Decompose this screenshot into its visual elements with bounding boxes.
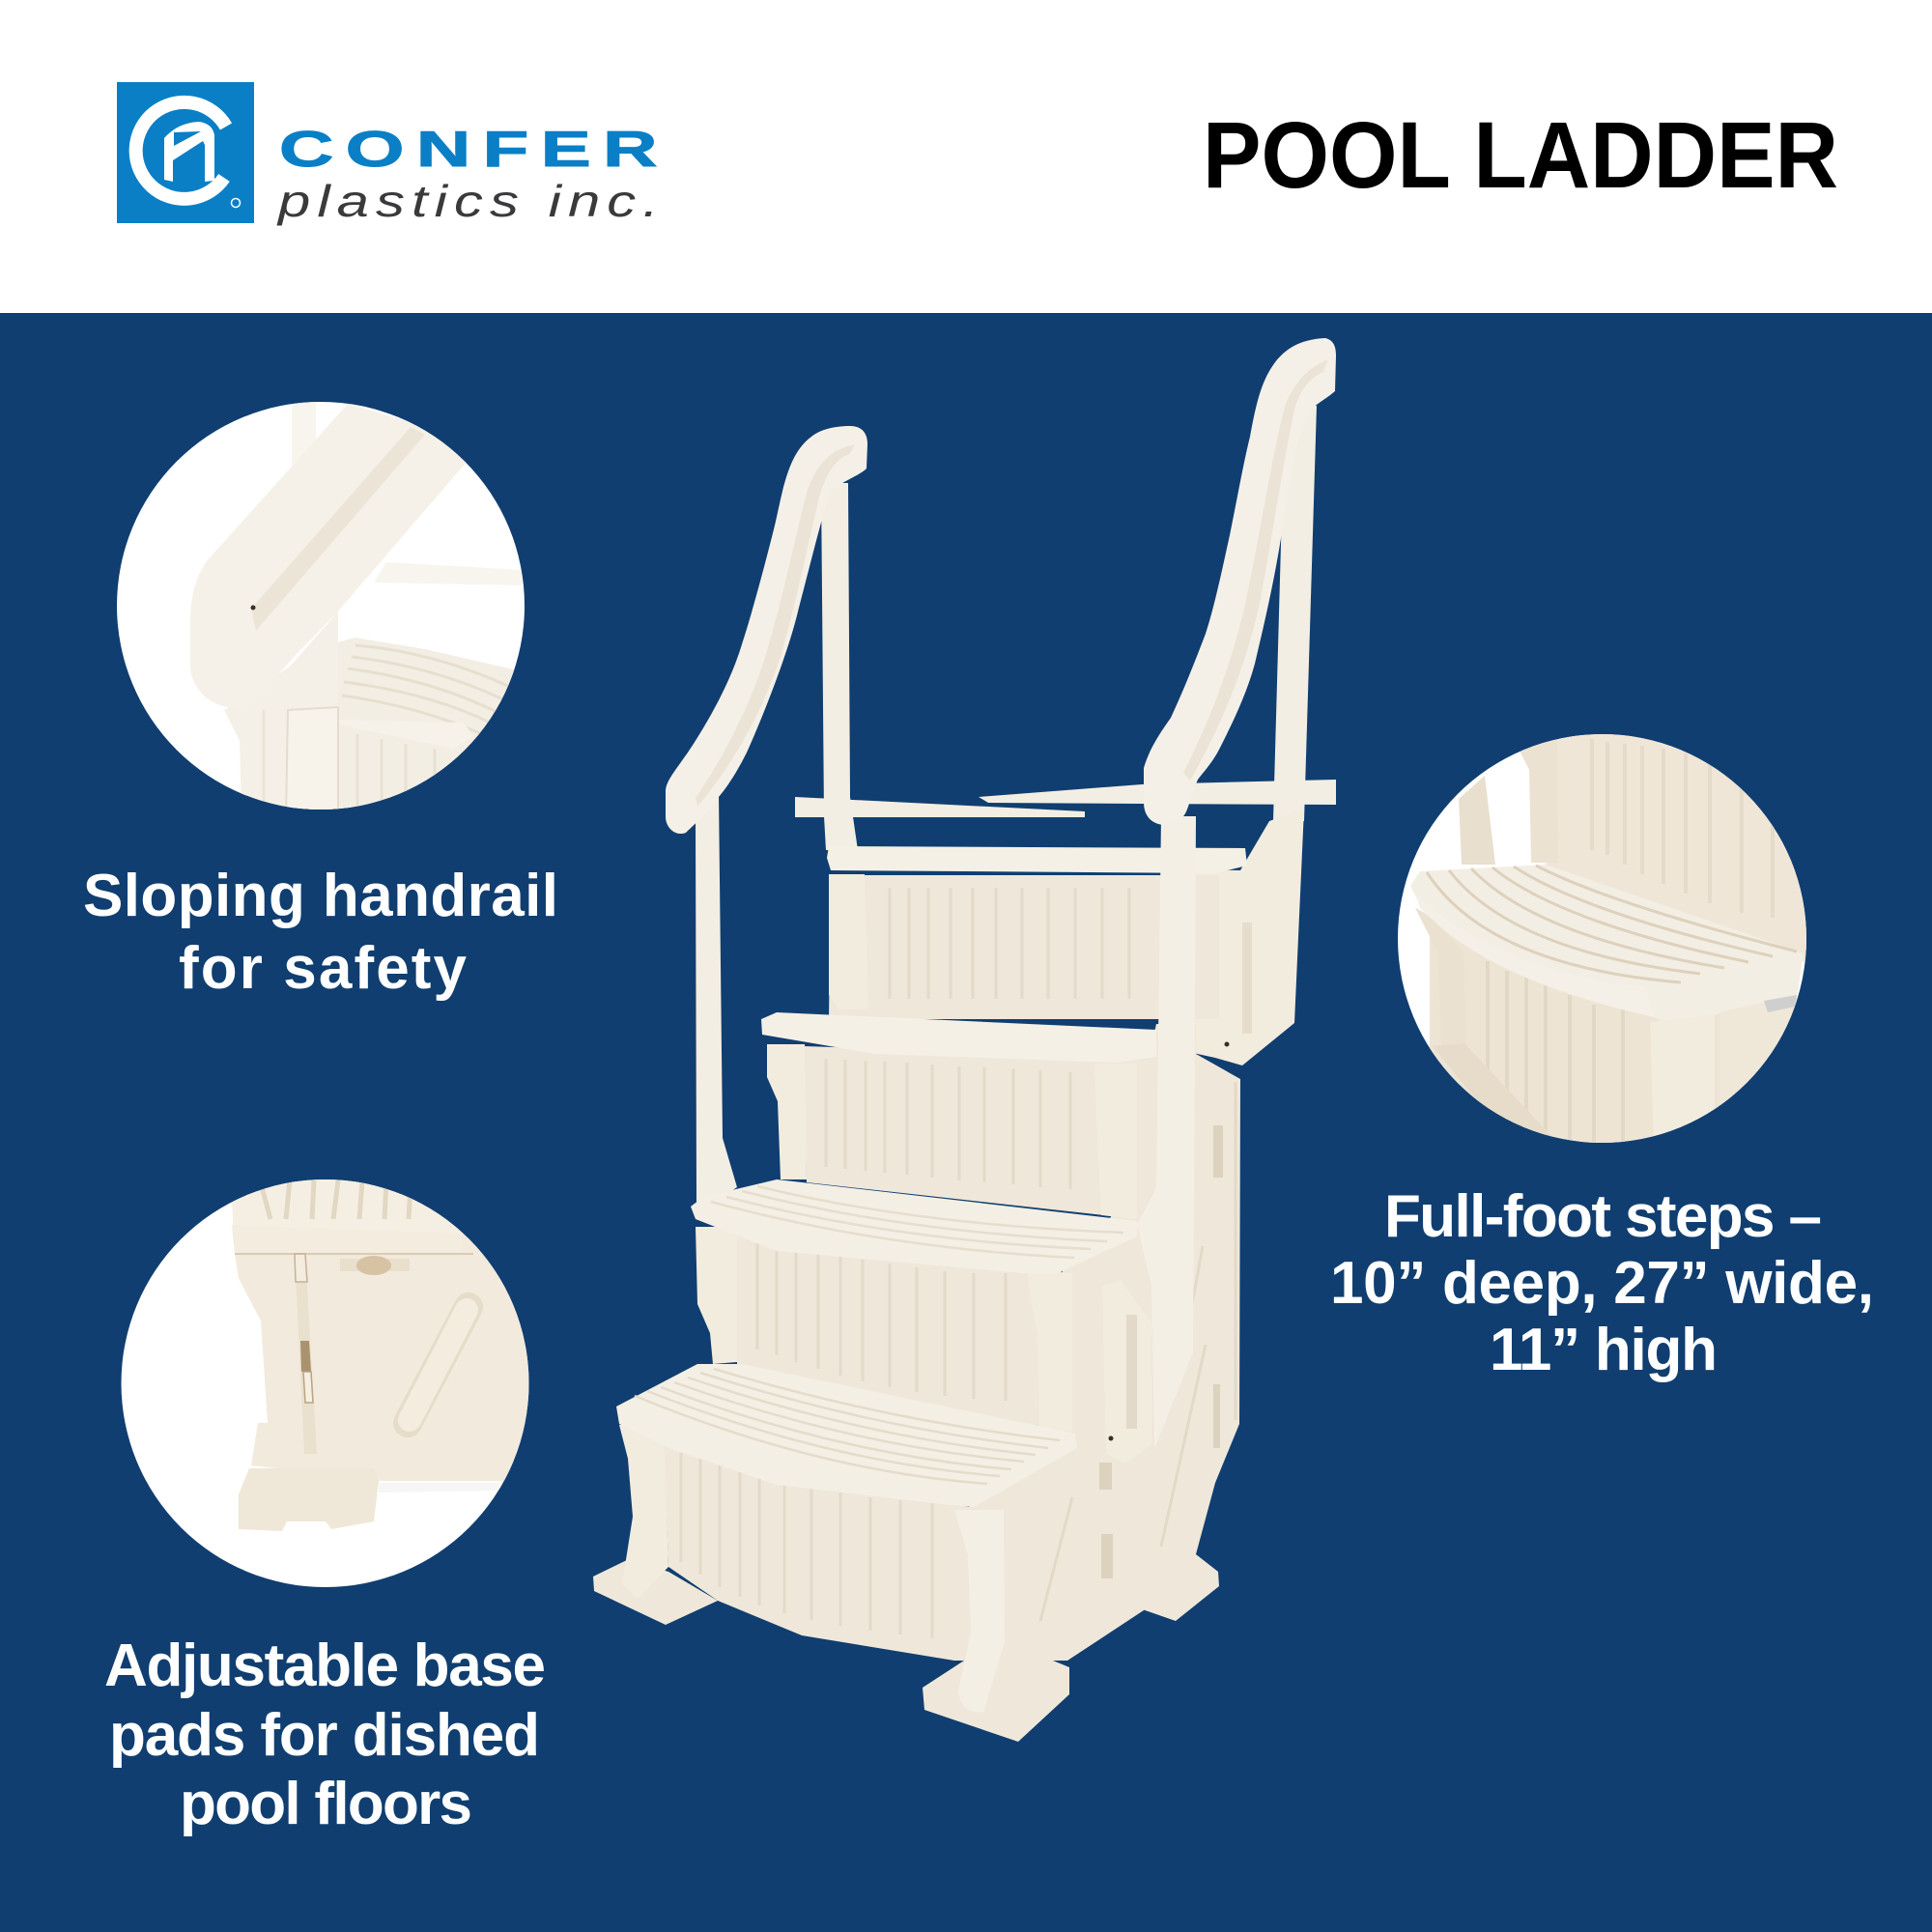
caption: sloping handrail: for safety — [179, 935, 468, 1002]
front right leg on pad — [954, 1510, 1005, 1712]
caption: sloping handrail: Sloping handrail — [83, 863, 558, 929]
caption: full-foot steps — [1330, 1183, 1874, 1383]
front base pad — [923, 1661, 1069, 1742]
right handrail — [1144, 338, 1336, 825]
right side panel — [1193, 809, 1304, 1065]
step two — [761, 1012, 1156, 1221]
header band — [0, 0, 1932, 313]
circle: full-foot steps detail — [1398, 729, 1816, 1159]
step three — [691, 1179, 1137, 1434]
caption: adjustable base pads: pads for dished — [109, 1702, 540, 1769]
back posts and cross bars — [795, 406, 1336, 850]
caption: full-foot steps: 11” high — [1490, 1317, 1718, 1383]
caption: full-foot steps: Full-foot steps – — [1384, 1183, 1822, 1250]
circle: sloping handrail detail — [117, 396, 525, 831]
title: POOL LADDER — [1203, 102, 1838, 208]
base pads — [593, 1554, 1219, 1625]
caption: full-foot steps: 10” deep, 27” wide, — [1330, 1250, 1874, 1317]
left handrail — [666, 426, 867, 834]
right side handle panel — [1102, 1280, 1151, 1463]
logo: Confer Plastics: CONFER — [279, 122, 657, 178]
caption: adjustable base pads: Adjustable base — [104, 1633, 546, 1699]
product: pool ladder — [593, 338, 1336, 1742]
front right post — [1137, 816, 1196, 1449]
caption: adjustable base pads: pool floors — [180, 1771, 472, 1837]
logo: Confer Plastics — [117, 82, 659, 226]
blue gap between steps — [905, 1407, 1038, 1426]
circle: adjustable base pad detail — [122, 1179, 541, 1587]
bottom step — [616, 1364, 1077, 1661]
caption: adjustable base pads — [104, 1633, 546, 1837]
stair side body — [966, 1024, 1240, 1661]
top step — [827, 846, 1247, 1019]
caption: sloping handrail — [83, 863, 558, 1002]
logo: Confer Plastics: plastics inc. — [276, 177, 659, 226]
front left post — [696, 792, 737, 1202]
